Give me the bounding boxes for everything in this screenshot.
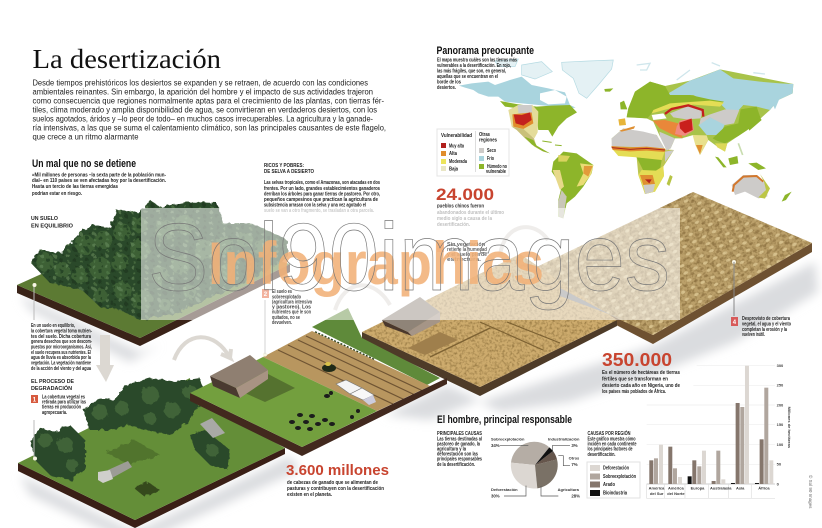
australia: [732, 175, 767, 198]
axis labels: 100: [777, 442, 784, 447]
region labels: Australasia: [710, 486, 732, 491]
hudson bay: [540, 90, 567, 104]
axis labels: 150: [777, 422, 784, 427]
text block: mil millones: dial– en 110 países se ven afectadas hoy por la desertificación.: [32, 178, 167, 184]
text block: principales causas: agricultura y la: [437, 446, 466, 452]
sahel red: [612, 148, 665, 150]
legend: vulnerability: regiones: [479, 138, 497, 144]
deforestation bars: [659, 366, 773, 484]
step 3 callout: [437, 242, 487, 263]
land base: eurasia: [627, 69, 793, 155]
credit: © Sol 90 Images: [808, 475, 814, 509]
region labels: América: [668, 486, 684, 491]
gobi: [699, 109, 739, 125]
legend: vulnerability: Otras: [479, 132, 490, 138]
intro text block: ambientales reinantes. Sin embargo, la aparición del hombre y el impacto de sus actividades trajeron: [32, 88, 373, 96]
australia band: [733, 176, 763, 192]
text: soil equilibrium explanation: vegetación. La vegetación mantiene: [31, 360, 91, 366]
text: un suelo en equilibrio: EN EQUILIBRIO: [31, 224, 74, 230]
text block: map description: aquellas que se encuentran en el: [437, 74, 498, 80]
watermark panel: [141, 208, 680, 320]
text block: causas por región: Este gráfico muestra cómo: [588, 436, 636, 442]
bioindustry bars: [688, 476, 759, 484]
text block: principales causas: deforestación son las: [437, 452, 478, 458]
text: soil equilibrium explanation: tes del suelo. Dicha cobertura: [31, 334, 91, 340]
step 4 callout: 4: [733, 320, 737, 326]
india south: [696, 145, 703, 154]
red ring: [665, 105, 703, 117]
arid west: [508, 105, 550, 153]
text: soil equilibrium explanation: puestos por microorganismos. Así,: [31, 344, 92, 350]
stat: 350.000: [602, 350, 680, 395]
madagascar: [667, 175, 673, 186]
china: [713, 107, 761, 143]
step 2 callout: [262, 289, 312, 354]
india: [693, 135, 708, 155]
axis labels: [777, 363, 792, 486]
isometric terrain: pasture with cattle: [190, 357, 447, 456]
legend: vulnerability: Húmedo no: [487, 164, 507, 170]
legend: causes: Sobreexplotación: [603, 474, 636, 480]
sahara: [612, 128, 665, 149]
legend: vulnerability: Alta: [449, 151, 457, 157]
text: soil equilibrium explanation: el suelo recupera sus nutrientes. El: [31, 350, 91, 356]
text block: causas por región: los principales factores de: [588, 446, 633, 452]
isometric terrain: dry straw fields: [362, 254, 625, 396]
central africa: [637, 157, 662, 172]
truck 1: [98, 461, 132, 483]
stat: 24.000: medio siglo a causa de la: [437, 216, 492, 222]
second barn: [382, 297, 458, 355]
stat: 350.000: los países más poblados de África.: [602, 388, 666, 395]
connector dots: [32, 260, 736, 460]
pie chart: Sobreexplotación: [491, 436, 525, 441]
legend: vulnerability: [437, 129, 509, 176]
text: un suelo en equilibrio: [31, 216, 74, 230]
caribbean: [542, 141, 562, 146]
text block: map description: El mapa muestra cuáles son las tierras más: [437, 58, 517, 64]
farmhouse: [210, 355, 268, 398]
pie chart: Industrialización: [548, 436, 580, 441]
pie chart: 34%: [491, 443, 500, 448]
text block: mil millones: »Mil millones de personas –la sexta parte de la población mun-: [32, 172, 166, 178]
text block: map description: desiertos.: [437, 85, 456, 91]
text: soil equilibrium explanation: de la acción del viento y del agua: [31, 366, 91, 372]
text block: mil millones: [32, 172, 167, 197]
step 4 callout: [731, 262, 791, 338]
south africa red: [645, 179, 652, 183]
pie chart: Deforestación: [491, 487, 518, 492]
intro text block: [32, 78, 386, 142]
isometric terrain: ploughed field: [263, 331, 430, 411]
step 4 callout: vegetal, el agua y el viento: [742, 322, 791, 328]
intro text block: que crece a un ritmo alarmante: [32, 132, 139, 142]
step 1: agropecuaria.: [42, 410, 67, 416]
step 4 callout: completan la erosión y la: [742, 327, 787, 333]
stat: 350.000: 350.000: [602, 350, 672, 370]
curved arrow: straw to desert: [500, 227, 548, 255]
step 2 callout: y pastoreo). Los: [272, 304, 311, 310]
text block: principales causas: [437, 431, 483, 468]
text block: principales causas: principales responsables: [437, 456, 482, 462]
step 4 callout: Desprovisto de cobertura: [742, 316, 790, 322]
text: el proceso de degradación: EL PROCESO DE: [31, 379, 74, 385]
ground shadows: [20, 262, 818, 528]
step 2 callout: (agricultura intensiva: [272, 300, 312, 306]
text: el proceso de degradación: DEGRADACIÓN: [31, 384, 72, 392]
stat: 24.000: [436, 185, 504, 228]
stat: 3.600 millones: existen en el planeta.: [287, 492, 333, 498]
kamchatka sakhalin: [772, 97, 780, 109]
middle east orange: [653, 120, 683, 138]
text block: causas por región: desertificación.: [588, 452, 616, 458]
red core: [679, 119, 693, 133]
step 4 callout: vuelven inútil.: [742, 332, 765, 338]
siberia: [668, 69, 793, 116]
stat: 24.000: abandonados durante el último: [437, 210, 504, 216]
north africa coast: [619, 126, 635, 132]
iran afghanistan: [675, 118, 694, 136]
tanker truck and tractor: [322, 362, 376, 405]
map: south america: [552, 152, 593, 218]
stat: 24.000: 24.000: [436, 185, 494, 204]
intro text block: como consecuencia que regiones normalmente aptas para el crecimiento de las plantas, con tierras fér-: [32, 96, 384, 106]
heading: panorama preocupante: Panorama preocupante: [436, 45, 534, 57]
text: soil equilibrium explanation: agua de lluvia es absorbida por la: [31, 355, 91, 361]
intro text block: tiles, clima moderado y amplia disponibilidad de agua, se convirtieran en verdaderos desiertos, con los: [32, 106, 377, 114]
step 1: retirada para utilizar las: [42, 400, 86, 406]
text block: ricos y pobres: subsistencia arrasan con la selva y una vez agotado el: [264, 202, 366, 208]
isometric terrain: intact forest slab: [17, 200, 290, 346]
gap shadow along desert slab: [560, 288, 625, 320]
cold north america: [459, 77, 576, 108]
heading: el hombre: El hombre, principal responsable: [437, 414, 572, 426]
land base: africa: [612, 128, 674, 194]
axis labels: 250: [777, 383, 784, 388]
ploughing bars: [649, 403, 764, 484]
text block: mil millones: Hasta un tercio de las tierras emergidas: [32, 184, 118, 190]
sahel orange: [611, 146, 665, 152]
overexploitation bars: [654, 388, 768, 484]
philippines: [738, 143, 743, 155]
isometric terrain: degraded forest slab: [18, 378, 285, 528]
iceland: [604, 88, 613, 92]
stat: 3.600 millones: 3.600 millones: [286, 462, 389, 479]
text block: principales causas: pastoreo de ganado, la: [437, 442, 480, 448]
southern africa: [638, 166, 664, 194]
text block: map description: [437, 58, 517, 91]
region labels: del Sur: [650, 491, 664, 496]
cows: [289, 391, 360, 431]
legend: vulnerability: Muy alta: [449, 144, 464, 150]
text: soil equilibrium explanation: genera desechos que son descom-: [31, 339, 92, 345]
axis labels: 300: [777, 363, 784, 368]
step 2 callout: 2: [264, 292, 268, 298]
text: soil equilibrium explanation: En un suelo en equilibrio,: [31, 323, 75, 329]
connector line 1: [33, 285, 35, 457]
intro text block: suelos agotados, áridos y –lo peor de todo– en muchos casos irrecuperables. La agricultura y la ganade-: [32, 114, 373, 124]
text block: causas por región: inciden en cada continente: [588, 442, 637, 448]
watermark: infographics: Infographics: [208, 230, 544, 297]
step 2 callout: devuelven.: [272, 320, 292, 326]
axis labels: 50: [777, 462, 782, 467]
legend: vulnerability: Moderada: [449, 159, 467, 165]
stat: 24.000: pueblos chinos fueron: [437, 204, 484, 210]
axis labels: 200: [777, 402, 784, 407]
pie chart: 7%: [571, 462, 578, 467]
pie chart: Agricultura: [558, 487, 580, 492]
stat: 3.600 millones: [286, 462, 389, 498]
region labels: [647, 484, 775, 498]
map: eurasia africa oceania: [611, 63, 793, 202]
step 2 callout: El suelo es: [272, 289, 292, 295]
text block: causas por región: CAUSAS POR REGIÓN: [588, 429, 631, 437]
text: un suelo en equilibrio: UN SUELO: [31, 216, 59, 222]
step 2 callout: nutrientes que le son: [272, 310, 311, 316]
text block: ricos y pobres: frentes. Por un lado, grandes establecimientos ganaderos: [264, 186, 380, 192]
step 1: [31, 394, 86, 416]
intro text block: ría intensivas, a las que se suma el calentamiento climático, son las principales causantes de este flagelo,: [32, 124, 386, 132]
text block: ricos y pobres: DE SELVA A DESIERTO: [264, 169, 314, 175]
axis labels: 0: [777, 481, 780, 486]
legend: vulnerability: Baja: [449, 166, 458, 172]
bar chart: [647, 363, 792, 498]
legend: causes: [587, 462, 640, 498]
text block: causas por región: [588, 429, 637, 458]
text block: ricos y pobres: Las selvas tropicales, como el Amazonas, son atacadas en dos: [264, 180, 380, 186]
south africa orange: [640, 175, 655, 185]
region labels: Asia: [736, 486, 745, 491]
legend: causes: Bioindustria: [603, 490, 627, 496]
step 1: 1: [33, 398, 37, 404]
text: soil equilibrium explanation: [31, 323, 92, 372]
region labels: del Norte: [667, 491, 685, 496]
text block: principales causas: PRINCIPALES CAUSAS: [437, 431, 483, 437]
text block: map description: vulnerables a la desertificación. En rojo,: [437, 63, 511, 69]
heading: un mal que no se detiene: Un mal que no se detiene: [32, 158, 136, 170]
title: La desertización: [32, 44, 222, 74]
sahel yellow: [613, 149, 665, 161]
stat: 3.600 millones: de cabezas de ganado que se alimentan de: [287, 480, 378, 486]
curved arrow: farm to straw: [335, 285, 390, 310]
humid north america: [500, 101, 577, 137]
isometric terrain: cracked desert slab: [522, 192, 812, 344]
text: el proceso de degradación: [31, 379, 74, 392]
step 2 callout: sobreexplotado: [272, 294, 301, 300]
archipelagos: [715, 117, 766, 170]
pie chart: Otros: [569, 455, 580, 460]
pie chart: 30%: [491, 494, 500, 499]
text block: principales causas: de la desertificación.: [437, 462, 475, 468]
tree canopy: [30, 200, 287, 320]
arabia: [659, 132, 675, 151]
arctic islands: [637, 63, 765, 80]
step 3 callout: Sin vegetación: [447, 242, 485, 248]
arrow down: [96, 335, 114, 382]
stat: 3.600 millones: pasturas y contribuyen con la desertificación: [287, 486, 384, 492]
new zealand: [782, 192, 792, 202]
map: americas: [459, 59, 613, 153]
text block: map description: borde de los: [437, 80, 461, 86]
steppe band: [652, 101, 724, 113]
region labels: África: [758, 486, 770, 491]
region labels: América: [649, 486, 665, 491]
legend: vulnerability: Frío: [487, 156, 494, 162]
legend: vulnerability: Vulnerabilidad: [441, 133, 472, 139]
europe and russian forest: [627, 82, 724, 118]
step 3 callout: estructura.: [447, 257, 482, 263]
pie chart: 28%: [571, 494, 580, 499]
text block: ricos y pobres: suelo se van a otro fragmento, se trasladan a otra parcela.: [264, 208, 374, 214]
pie chart: 3%: [571, 443, 578, 448]
se asia: [715, 143, 727, 152]
text: soil equilibrium explanation: la cobertura vegetal toma nutrien-: [31, 328, 92, 334]
legend: causes: Arado: [603, 482, 615, 488]
axis labels: Millones de hectáreas: [787, 407, 792, 449]
step 3 callout: retiene la humedad: [447, 247, 487, 253]
text block: map description: las más frágiles, que son, en general,: [437, 68, 506, 74]
legend: vulnerability: Seco: [487, 148, 496, 154]
text block: ricos y pobres: RICOS Y POBRES:: [264, 163, 304, 169]
tibet: [698, 117, 725, 135]
remaining trees: [30, 378, 230, 480]
central asia dry: [670, 106, 703, 119]
stat: 350.000: fértiles que se transforman en: [602, 376, 668, 382]
text block: ricos y pobres: [264, 163, 380, 214]
stat: 350.000: desierto cada año en Nigeria, uno de: [602, 383, 680, 389]
step 3 callout: y el suelo pierde: [447, 252, 487, 258]
text block: mil millones: podrían estar en riesgo.: [32, 191, 83, 197]
black sea: [652, 113, 667, 120]
legend: causes: Deforestación: [603, 466, 629, 472]
south africa dry: [643, 184, 655, 194]
greenland and arctic islands: [495, 59, 613, 98]
australia east: [758, 174, 770, 199]
step 2 callout: quitados, no se: [272, 315, 300, 321]
britain: [620, 101, 627, 109]
region labels: Europa: [691, 486, 705, 491]
text block: ricos y pobres: derriban los árboles para ganar tierras de pastoreo. Por otro,: [264, 192, 380, 198]
iberia: [618, 118, 626, 126]
pie chart: [491, 436, 580, 499]
horn of africa: [665, 150, 674, 162]
intro text block: Desde tiempos prehistóricos los desiertos se expanden y se retraen, de acuerdo con las condiciones: [32, 78, 368, 88]
truck 2: [200, 418, 225, 438]
stat: 350.000: Es el número de hectáreas de tierras: [602, 370, 680, 376]
text block: principales causas: Las tierras destinadas al: [437, 436, 482, 442]
text block: ricos y pobres: pequeños campesinos que practican la agricultura de: [264, 197, 378, 203]
legend: vulnerability: vulnerable: [486, 169, 506, 175]
isometric terrain: green strip: [312, 308, 440, 385]
watermark: sol90images: Sol90images: [148, 204, 670, 311]
step 1: La cobertura vegetal es: [42, 394, 85, 400]
step 1: tierras en producción: [42, 404, 81, 410]
curved arrow: forest to farm: [174, 337, 231, 360]
stat: 24.000: desertificación.: [437, 222, 471, 228]
